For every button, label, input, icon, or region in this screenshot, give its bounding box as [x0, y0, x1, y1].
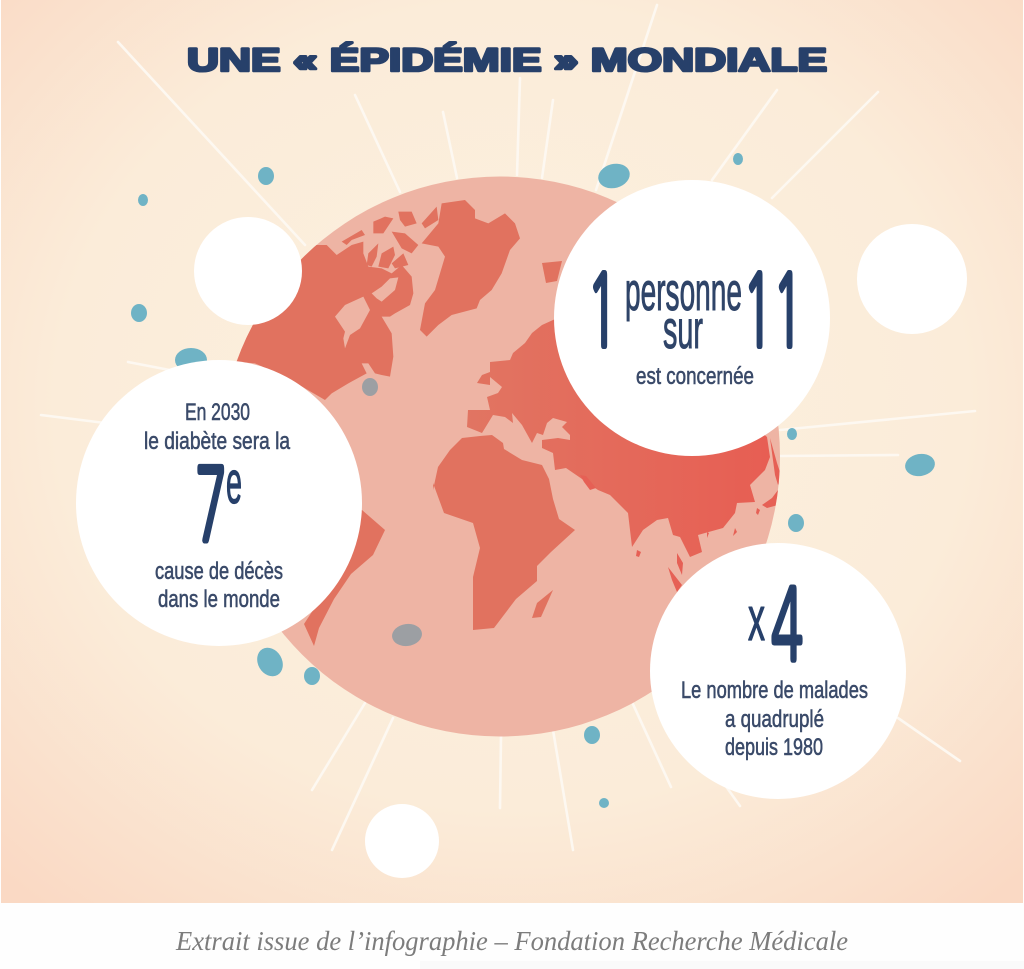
callout: 1 personne sur 11: 1 — [587, 262, 618, 361]
callout: x4: depuis 1980 — [725, 734, 823, 761]
Asian islands — [580, 438, 782, 592]
South America — [300, 510, 385, 646]
callout: 1 personne sur 11 — [554, 180, 830, 456]
Madagascar — [532, 590, 553, 618]
United Kingdom — [477, 372, 490, 385]
Eurasia — [467, 300, 770, 557]
callout: 7e cause de décès: le diabète sera la — [144, 428, 291, 455]
globe with world map — [215, 176, 782, 736]
callout: 7e cause de décès: En 2030 — [185, 399, 250, 426]
callout: x4: x — [748, 585, 765, 654]
callout: 7e cause de décès: e — [226, 449, 242, 516]
Hudson Bay — [335, 277, 398, 348]
teal droplets — [131, 153, 937, 808]
callout: x4 — [650, 543, 906, 799]
callout: 1 personne sur 11: personne — [625, 262, 742, 322]
callout: 7e cause de décès: cause de décès — [155, 558, 283, 585]
callout: 7e cause de décès: dans le monde — [158, 586, 280, 613]
callout: 1 personne sur 11: est concernée — [636, 363, 754, 390]
title: UNE « ÉPIDÉMIE » MONDIALE — [187, 42, 827, 78]
Svalbard — [542, 261, 562, 283]
callout: x4: 4 — [771, 577, 803, 675]
caption: Extrait issue de l’infographie – Fondation Recherche Médicale — [175, 926, 848, 956]
Africa — [433, 435, 575, 630]
callout: 7e cause de décès: 7 — [195, 456, 227, 556]
sunburst rays — [41, 5, 975, 850]
callout: x4: a quadruplé — [725, 706, 824, 733]
callout: 1 personne sur 11: sur — [663, 300, 703, 360]
callout: 7e cause de décès — [76, 360, 362, 646]
callout: 1 personne sur 11: 11 — [743, 262, 803, 361]
grey droplets — [362, 378, 423, 648]
footer faint grey band — [420, 961, 1024, 969]
callout: x4: Le nombre de malades — [681, 677, 868, 704]
Greenland — [420, 200, 520, 337]
Canada, USA and Arctic islands — [215, 200, 520, 400]
decorative white circles — [194, 217, 967, 878]
